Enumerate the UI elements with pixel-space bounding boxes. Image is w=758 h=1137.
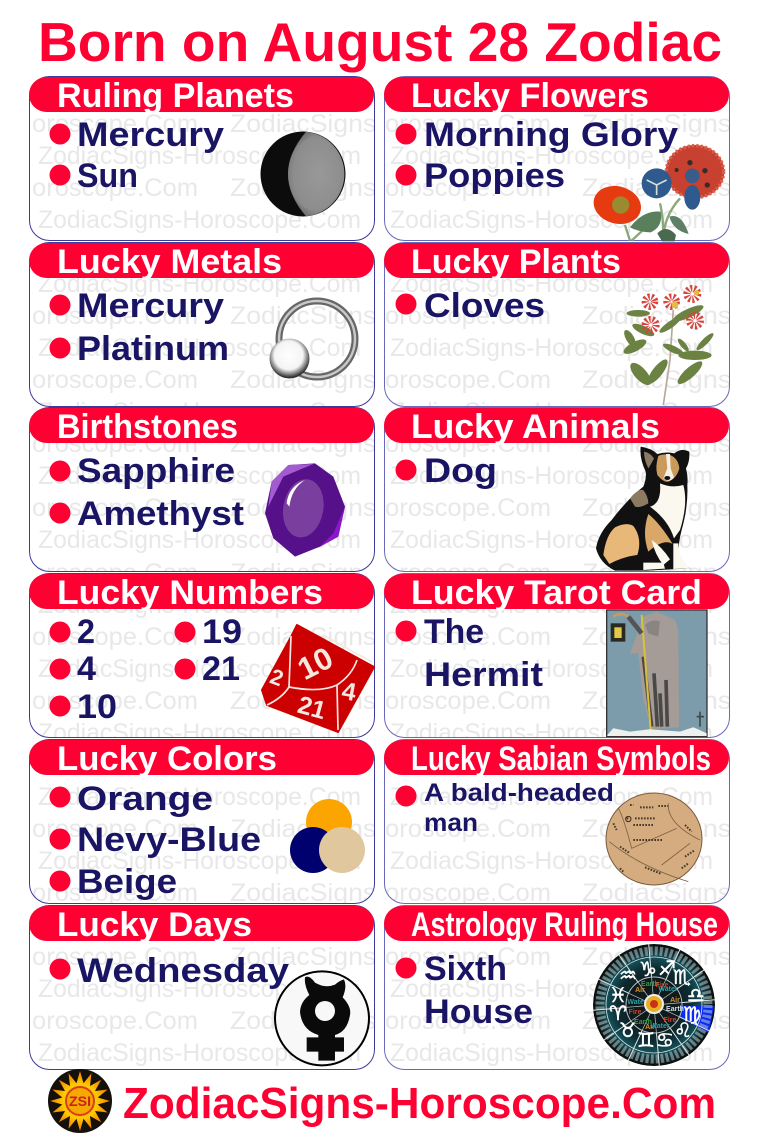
item: dog: Dog [424, 452, 497, 490]
icon: silver ring [270, 301, 355, 378]
item: sabian symbol text: man [424, 809, 478, 837]
watermark text pattern: ZodiacSigns-Horoscope.Com [390, 462, 713, 490]
icon: zodiac wheel: ♑ [639, 957, 657, 981]
number 21: 21 [202, 650, 240, 688]
number 10: 10 [77, 688, 117, 726]
watermark text pattern: ZodiacSigns-Horoscope.Com [390, 655, 713, 683]
watermark text pattern: ZodiacSigns-Horoscope.Com [38, 783, 361, 811]
heading: lucky animals: Lucky Animals [411, 408, 660, 446]
watermark text pattern: oroscope.Com [385, 366, 551, 394]
watermark text pattern: ZodiacSigns-Horoscope.Com [38, 975, 361, 1003]
watermark text pattern: ZodiacSigns- [230, 943, 385, 971]
icon: zodiac wheel: ♌ [674, 1018, 692, 1042]
item: sixth house: House [424, 993, 533, 1031]
watermark text pattern: oroscope.Com [32, 302, 198, 330]
icon: zodiac wheel: Earth [641, 981, 659, 988]
panel: lucky plants [384, 242, 730, 406]
watermark text pattern: oroscope.Com [32, 815, 198, 843]
panel: lucky metals [29, 242, 374, 406]
watermark text pattern: ZodiacSigns-Horoscope.Com [38, 398, 361, 426]
watermark text pattern: ZodiacSigns-H [582, 815, 758, 843]
watermark text pattern: ZodiacSigns-Horoscope.Com [38, 847, 361, 875]
watermark text pattern: ZodiacSigns-Horoscope.Com [390, 526, 713, 554]
watermark text pattern: ZodiacSigns-Horoscope.Com [38, 206, 361, 234]
icon: zodiac wheel [593, 944, 715, 1066]
heading: lucky numbers: Lucky Numbers [57, 574, 323, 612]
icon: collie dog [596, 447, 691, 571]
watermark text pattern: ZodiacSigns- [230, 815, 385, 843]
item: orange: Orange [77, 780, 213, 818]
watermark text pattern: ZodiacSigns-Horoscope.Com [390, 142, 713, 170]
heading: ruling planets: Ruling Planets [57, 77, 294, 115]
icon: amethyst gem [265, 463, 345, 557]
watermark text pattern: oroscope.Com [385, 943, 551, 971]
icon: ten sided die: 2 [267, 664, 287, 691]
icon: zodiac wheel: ♋ [656, 1028, 674, 1052]
watermark text pattern: ZodiacSigns-Horoscope.Com [390, 719, 713, 747]
footer logo: ZSI [69, 1093, 91, 1109]
heading: lucky tarot card: Lucky Tarot Card [411, 574, 702, 612]
watermark text pattern: ZodiacSigns-Horoscope.Com [390, 847, 713, 875]
item: mercury: Mercury [77, 116, 224, 154]
panel: birthstones [29, 408, 374, 572]
item: the hermit [424, 613, 543, 694]
watermark text pattern: ZodiacSigns-Horoscope.Com [390, 1039, 713, 1067]
watermark text pattern: ZodiacSigns- [230, 366, 385, 394]
icon: zodiac wheel: Earth [666, 1006, 684, 1013]
icon: zodiac wheel: ♍ [683, 1002, 701, 1026]
item: sapphire: Sapphire [77, 452, 235, 490]
watermark text pattern: ZodiacSigns-H [582, 879, 758, 907]
watermark text pattern: oroscope.Com [32, 1007, 198, 1035]
watermark text pattern: ZodiacSigns-Horoscope.Com [390, 334, 713, 362]
watermark text pattern: ZodiacSigns-H [582, 430, 758, 458]
watermark text pattern: ZodiacSigns-H [582, 1007, 758, 1035]
item: nevy-blue: Nevy-Blue [77, 821, 261, 859]
watermark text pattern: ZodiacSigns- [230, 430, 385, 458]
icon: zodiac wheel: Fire [656, 982, 669, 989]
heading: lucky colors: Lucky Colors [57, 740, 277, 778]
icon: colour swatches [290, 799, 365, 873]
watermark text pattern: ZodiacSigns-Horoscope.Com [390, 398, 713, 426]
item: sixth house [424, 950, 533, 1031]
watermark text pattern: oroscope.Com [32, 879, 198, 907]
icon: zodiac wheel: ♉ [619, 1018, 637, 1042]
icon: zodiac wheel: ♒ [619, 963, 637, 987]
watermark text pattern: oroscope.Com [32, 687, 198, 715]
watermark text pattern: oroscope.Com [385, 494, 551, 522]
watermark text pattern: ZodiacSigns-H [582, 302, 758, 330]
watermark text pattern: oroscope.Com [385, 174, 551, 202]
watermark text pattern: oroscope.Com [385, 815, 551, 843]
panel: lucky numbers [29, 574, 374, 738]
item: sabian symbol text [424, 779, 614, 837]
watermark text pattern: ZodiacSigns-Horoscope.Com [38, 526, 361, 554]
watermark text pattern: ZodiacSigns-Horoscope.Com [38, 142, 361, 170]
panel: lucky animals [384, 408, 730, 572]
watermark text pattern: ZodiacSigns-Horoscope.Com [390, 591, 713, 619]
icon: flower bouquet [589, 145, 724, 241]
watermark text pattern: ZodiacSigns-H [582, 623, 758, 651]
icon: zodiac wheel: Water [658, 986, 678, 993]
watermark text pattern: ZodiacSigns- [230, 1007, 385, 1035]
watermark text pattern: ZodiacSigns-Horoscope.Com [390, 783, 713, 811]
panel: lucky tarot card [384, 574, 730, 738]
watermark text pattern: oroscope.Com [32, 559, 198, 587]
watermark text pattern: oroscope.Com [32, 110, 198, 138]
watermark text pattern: oroscope.Com [385, 430, 551, 458]
icon: zodiac wheel: ♎ [687, 983, 705, 1007]
watermark text pattern: oroscope.Com [32, 494, 198, 522]
icon: zodiac wheel: Air [635, 987, 645, 994]
panel: lucky days [29, 906, 374, 1070]
footer website name: ZodiacSigns-Horoscope.Com [123, 1079, 716, 1128]
watermark text pattern: ZodiacSigns- [230, 687, 385, 715]
watermark text pattern: oroscope.Com [32, 943, 198, 971]
watermark text pattern: oroscope.Com [32, 430, 198, 458]
icon: zodiac wheel: Air [670, 997, 680, 1004]
item: the hermit: The [424, 613, 484, 651]
icon: zodiac wheel: ♈ [609, 1001, 627, 1025]
watermark text pattern: oroscope.Com [385, 623, 551, 651]
watermark text pattern: ZodiacSigns- [230, 302, 385, 330]
icon: zodiac wheel: ♊ [637, 1028, 655, 1052]
watermark text pattern: oroscope.Com [385, 879, 551, 907]
watermark text pattern: ZodiacSigns-H [582, 366, 758, 394]
watermark text pattern: oroscope.Com [32, 623, 198, 651]
item: sabian symbol text: A bald-headed [424, 779, 614, 807]
icon: zodiac wheel: Water [627, 999, 647, 1006]
icon: zodiac wheel: Fire [629, 1009, 642, 1016]
watermark text pattern: oroscope.Com [385, 110, 551, 138]
heading: lucky days: Lucky Days [57, 906, 252, 944]
watermark text pattern: ZodiacSigns-H [582, 110, 758, 138]
watermark text pattern: ZodiacSigns-Horoscope.Com [38, 655, 361, 683]
icon: zodiac wheel: Fire [664, 1017, 677, 1024]
number 2: 2 [77, 613, 95, 651]
item: wednesday: Wednesday [77, 952, 289, 990]
watermark text pattern: ZodiacSigns-Horoscope.Com [38, 334, 361, 362]
watermark text pattern: ZodiacSigns-Horoscope.Com [38, 719, 361, 747]
watermark text pattern: ZodiacSigns-Horoscope.Com [390, 975, 713, 1003]
item: morning glory: Morning Glory [424, 116, 678, 154]
watermark text pattern: ZodiacSigns-Horoscope.Com [38, 270, 361, 298]
watermark text pattern: ZodiacSigns-Horoscope.Com [390, 270, 713, 298]
panel: lucky flowers [384, 76, 730, 241]
panel: lucky sabian symbols [384, 740, 730, 904]
icon: zodiac wheel: ♏ [673, 965, 691, 989]
watermark text pattern: ZodiacSigns- [230, 494, 385, 522]
panel: ruling planets [29, 76, 374, 240]
heading: lucky metals: Lucky Metals [57, 243, 282, 281]
icon: zodiac wheel: Air [645, 1024, 655, 1031]
icon: astrology chart disc [606, 793, 702, 885]
watermark text pattern: oroscope.Com [385, 559, 551, 587]
number 4: 4 [77, 650, 96, 688]
item: mercury: Mercury [77, 287, 224, 325]
item: amethyst: Amethyst [77, 495, 244, 533]
item: cloves: Cloves [424, 287, 545, 325]
icon: clove plant [622, 289, 715, 405]
icon: ten sided die: 4 [340, 677, 358, 707]
item: sixth house: Sixth [424, 950, 507, 988]
icon: zodiac wheel: Water [650, 1023, 670, 1030]
watermark text pattern: ZodiacSigns-Horoscope.Com [38, 1039, 361, 1067]
watermark text pattern: ZodiacSigns-H [582, 174, 758, 202]
icon: planet mercury [260, 132, 346, 216]
item: beige: Beige [77, 863, 177, 901]
watermark text pattern: ZodiacSigns-H [582, 687, 758, 715]
icon: mercury symbol [275, 971, 369, 1065]
watermark text pattern: ZodiacSigns- [230, 110, 385, 138]
watermark text pattern: oroscope.Com [385, 1007, 551, 1035]
icon: ten sided die: 10 [292, 640, 339, 687]
watermark text pattern: ZodiacSigns-H [582, 494, 758, 522]
footer logo [48, 1069, 112, 1133]
icon: ten sided die [262, 625, 374, 732]
number 19: 19 [202, 613, 242, 651]
heading: birthstones: Birthstones [57, 408, 238, 446]
watermark text pattern: ZodiacSigns- [230, 623, 385, 651]
icon: zodiac wheel: ♐ [658, 956, 676, 980]
panel: lucky colors [29, 740, 374, 904]
icon: ten sided die: 21 [295, 691, 329, 725]
icon: hermit tarot card [607, 610, 707, 737]
watermark text pattern: ZodiacSigns- [230, 879, 385, 907]
item: the hermit: Hermit [424, 656, 543, 694]
watermark text pattern: oroscope.Com [32, 366, 198, 394]
watermark text pattern: ZodiacSigns-Horoscope.Com [390, 206, 713, 234]
watermark text pattern: oroscope.Com [385, 302, 551, 330]
watermark text pattern: oroscope.Com [32, 174, 198, 202]
watermark text pattern: ZodiacSigns- [230, 559, 385, 587]
heading: lucky plants: Lucky Plants [411, 243, 621, 281]
title: Born on August 28 Zodiac [38, 11, 722, 73]
heading: lucky flowers: Lucky Flowers [411, 77, 649, 115]
watermark text pattern: ZodiacSigns-H [582, 559, 758, 587]
item: platinum: Platinum [77, 330, 229, 368]
panel: astrology ruling house [384, 906, 730, 1070]
item: poppies: Poppies [424, 157, 565, 195]
icon: zodiac wheel: ♓ [609, 983, 627, 1007]
item: sun: Sun [77, 157, 138, 195]
watermark text pattern: oroscope.Com [385, 687, 551, 715]
watermark text pattern: ZodiacSigns-Horoscope.Com [38, 462, 361, 490]
watermark text pattern: ZodiacSigns- [230, 174, 385, 202]
watermark text pattern: ZodiacSigns-Horoscope.Com [38, 591, 361, 619]
watermark text pattern: ZodiacSigns-H [582, 943, 758, 971]
icon: zodiac wheel: Earth [634, 1019, 652, 1026]
